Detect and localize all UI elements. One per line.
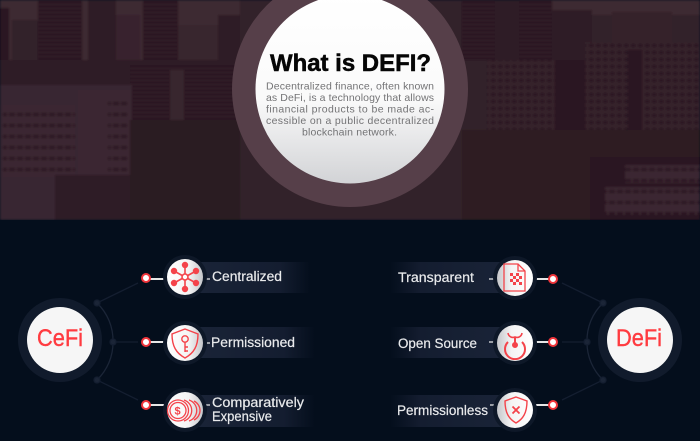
label xyxy=(212,395,304,424)
item: Permissioned: Permissioned xyxy=(211,335,295,350)
item: Permissionless: Permissionless xyxy=(397,403,488,418)
description text: financial products to be made ac- xyxy=(266,104,434,116)
item: Permissionless xyxy=(390,388,557,432)
item: Centralized: Centralized xyxy=(212,269,282,284)
lower dark panel xyxy=(0,220,700,441)
DeFi badge: DeFi xyxy=(616,325,662,352)
description text: blockchain network. xyxy=(302,126,397,138)
icon: network hub xyxy=(172,263,198,291)
label: Expensive xyxy=(212,409,272,424)
DeFi connector tree xyxy=(562,283,606,400)
item: Open Source xyxy=(390,321,557,365)
icon: shield with key xyxy=(172,329,198,358)
label: Comparatively xyxy=(212,395,304,410)
description text xyxy=(266,80,434,138)
panel: What is DEFI circle xyxy=(256,0,444,184)
outer translucent ring xyxy=(232,0,468,207)
item: Permissioned xyxy=(142,321,315,365)
item: Transparent xyxy=(390,256,557,300)
icon: pixelated document xyxy=(504,264,525,291)
description text: as DeFi, is a technology that allows xyxy=(266,92,434,104)
item: Open Source: Open Source xyxy=(398,336,477,351)
CeFi connector tree xyxy=(94,283,138,400)
icon: coins: $ xyxy=(174,406,181,418)
icon: open source fork xyxy=(505,333,525,359)
CeFi badge xyxy=(18,298,102,382)
CeFi badge: CeFi xyxy=(37,325,83,352)
item: Centralized xyxy=(142,255,310,299)
description text: cessible on a public decentralized xyxy=(266,115,434,127)
icon: coins xyxy=(168,400,200,421)
background: city skyline photo xyxy=(0,0,700,220)
title: What is DEFI? xyxy=(270,50,431,77)
description text: Decentralized finance, often known xyxy=(266,80,434,92)
item: Transparent: Transparent xyxy=(398,270,474,285)
icon: shield with cross xyxy=(505,397,527,423)
DeFi badge xyxy=(598,298,682,382)
item: Comparatively Expensive xyxy=(142,388,315,432)
